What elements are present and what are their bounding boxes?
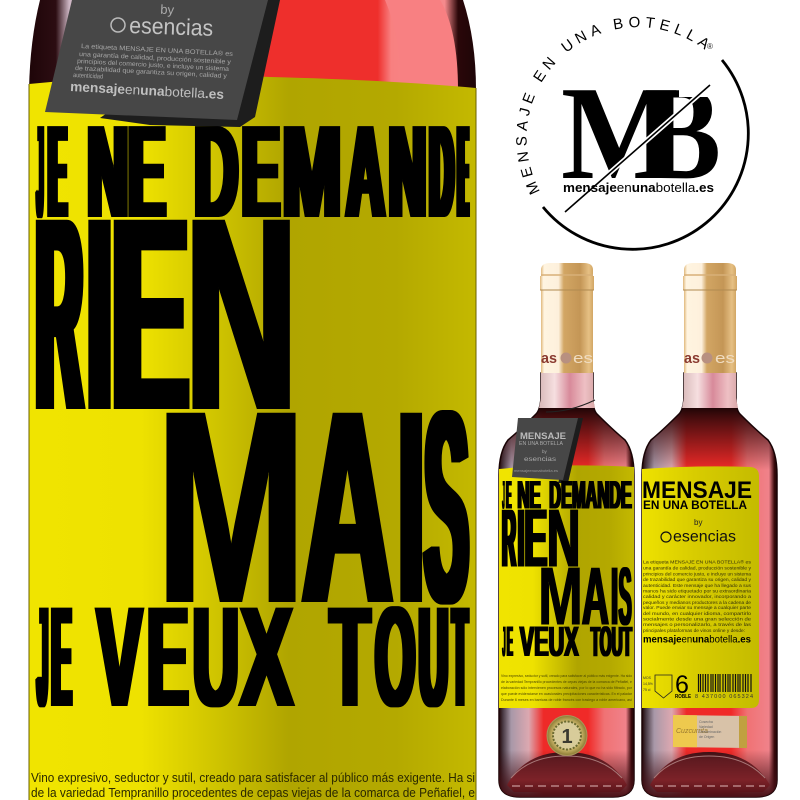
brand logo (516, 16, 750, 251)
hang tag: by (542, 449, 548, 454)
base shading (499, 750, 634, 797)
headline: large: M (282, 98, 341, 245)
small bottle: front (499, 263, 634, 797)
small description: de la variedad Tempranillo procedentes de cepas viejas de la comarca de Peñafiel, e (501, 679, 633, 684)
infographic canvas: TOUT (591, 618, 632, 666)
headline: small: E (507, 618, 513, 666)
hang tag: esencias (524, 457, 556, 463)
back label paragraph: principales plataformas de vinos online y desde: (643, 628, 745, 633)
small description: Durante 6 meses en barricas de roble francés con trasiego a roble americano, así (501, 697, 633, 702)
hang tag: La etiqueta MENSAJE EN UNA BOTELLA® es (81, 42, 234, 58)
logo website: mensajeenunabotella.es (563, 180, 714, 195)
neck (539, 373, 595, 408)
hang tag: principios del comercio justo, e incluye un sistema (77, 58, 229, 73)
headline: large: I (78, 161, 121, 468)
headline: large: J (37, 98, 43, 245)
age number: 6 (675, 671, 689, 699)
punt (650, 752, 770, 792)
by text: by (694, 518, 702, 527)
punt (507, 752, 627, 792)
back label paragraph: manos ha sido etiquetado por su extraordinaria (643, 588, 751, 594)
esencias logo: esencias (673, 528, 736, 546)
headline: small: A (582, 550, 609, 643)
barcode (695, 674, 753, 700)
winery sticker: Denominación (699, 730, 721, 734)
medal: 1 (561, 726, 573, 748)
barcode: 8 437000 065324 (695, 694, 753, 700)
headline: large: X (240, 578, 293, 737)
back label paragraph: pequeños y medianos productores a la cadena de (643, 600, 751, 605)
headline: small: I (609, 550, 620, 643)
small description: Vino expresivo, seductor y sutil, creado para satisfacer al público más exigente. Ha sido (501, 673, 633, 678)
headline: small: E (506, 474, 511, 518)
winery sticker: de Origen (699, 735, 714, 739)
back label paragraph: La etiqueta MENSAJE EN UNA BOTELLA® es (643, 558, 752, 564)
circle arc (543, 60, 748, 249)
back label (642, 466, 759, 708)
back label heading: EN UNA BOTELLA (643, 500, 747, 512)
headline: large: R (36, 161, 82, 468)
small bottle: back (642, 263, 777, 797)
headline: large: A (302, 354, 393, 661)
capsule logo: as (541, 350, 557, 367)
headline: large: M (156, 354, 306, 661)
infographic canvas: DEMANDE (549, 474, 632, 518)
headline: large: J (37, 578, 48, 737)
capsule logo: as (684, 350, 700, 367)
back label paragraph: mensajes o personalizarlo, a través de las (643, 622, 752, 627)
capsule logo (541, 350, 593, 367)
headline: small: NE (517, 474, 541, 518)
infographic canvas: T (453, 578, 467, 737)
back label paragraph: autenticidad. Este mensaje que ha llegado a sus (643, 583, 752, 588)
back label paragraph: del mundo, en cualquier idioma, compartirlo (643, 611, 751, 616)
hang tag: MENSAJE (520, 431, 566, 441)
hang tag: by (160, 2, 175, 17)
monogram MB: M (561, 59, 680, 207)
headline: large: O (375, 578, 415, 737)
small legal text: 14,5% (643, 682, 653, 686)
infographic canvas: S (618, 550, 632, 643)
small legal text: MOS (643, 676, 652, 680)
registered mark: ® (707, 42, 713, 51)
hang tag: esencias (129, 12, 214, 41)
headline: large: D (194, 98, 238, 245)
back label paragraph: socialmente desde una gran selección de (643, 616, 751, 622)
back label paragraph: principios del comercio justo, e incluye un sistema (643, 572, 751, 576)
neck string (546, 400, 595, 412)
hang tag: mensajeenunabotella.es (514, 468, 558, 473)
monogram MB: B (644, 59, 721, 207)
hang tag: una garantía de calidad, producción sostenible y (79, 51, 232, 66)
headline: small (502, 474, 632, 666)
winery sticker: Cosecha (699, 720, 713, 724)
headline: large: NE (88, 98, 166, 245)
back label website: mensajeenunabotella.es (643, 634, 751, 646)
headline: large: N (389, 98, 426, 245)
back label paragraph: calidad y carácter innovador, incorporando a (643, 594, 751, 599)
small legal text (643, 676, 653, 692)
large bottle close-up (29, 0, 476, 800)
headline: large: E (112, 161, 188, 468)
capsule logo: es (573, 350, 593, 367)
headline: large: A (346, 98, 384, 245)
large bottle close-up: U (419, 578, 448, 737)
headline: small: J (502, 618, 506, 666)
capsule (683, 263, 737, 373)
headline: small: E (524, 492, 547, 584)
headline: large: E (49, 98, 66, 245)
headline: small: M (538, 550, 583, 643)
label (499, 465, 634, 708)
capsule logo (684, 350, 735, 367)
headline: small: R (502, 492, 516, 584)
headline: small: VEUX (520, 618, 579, 666)
small description (501, 673, 633, 702)
base shading (642, 750, 777, 797)
infographic canvas: D (430, 98, 453, 245)
back label heading: MENSAJE (642, 477, 752, 504)
headline: large: N (186, 161, 297, 468)
wine description text: de la variedad Tempranillo procedentes de cepas viejas de la comarca de Peñafiel, e (31, 786, 475, 800)
hang tag: de trazabilidad que garantiza su origen, calidad y (75, 65, 228, 80)
hang tag: EN UNA BOTELLA (519, 441, 564, 447)
wine description text (31, 771, 475, 800)
headline: small: N (547, 492, 580, 584)
headline: large: I (392, 354, 430, 661)
capsule logo: es (715, 350, 735, 367)
capsule (540, 263, 594, 373)
headline: small: J (502, 474, 505, 518)
back label paragraph: de trazabilidad que garantiza su origen, calidad y (643, 577, 752, 582)
headline: small: I (515, 492, 528, 584)
back label paragraph: una garantía de calidad, producción sostenible y (643, 566, 752, 570)
hang tag (45, 0, 280, 127)
headline: large: E (52, 578, 71, 737)
shoulder shading (499, 373, 634, 797)
hang tag: mensajeenunabotella.es (70, 79, 224, 102)
glass body (642, 373, 777, 797)
small legal text: 75 cl (643, 688, 651, 692)
circular brand text: MENSAJE EN UNA BOTELLA (516, 16, 708, 195)
shield mark (655, 675, 672, 698)
winery sticker: Cuzcurrita (676, 728, 708, 735)
medal (547, 716, 587, 756)
yellow label background (29, 76, 476, 800)
infographic canvas: E (459, 98, 467, 245)
headline: large: V (97, 578, 142, 737)
hang tag (512, 418, 583, 483)
age number: ROBLE (675, 694, 692, 700)
glass body (499, 373, 634, 797)
headline: large: T (330, 578, 370, 737)
small description: que puede evidenciarse en ocasionales precipitaciones características. En el paladar (501, 691, 633, 696)
winery sticker (673, 715, 747, 748)
headline: large: U (193, 578, 239, 737)
headline: large: E (147, 578, 188, 737)
infographic canvas: S (424, 354, 468, 661)
bottle glass upper body (29, 0, 476, 90)
headline: large: E (242, 98, 280, 245)
back label paragraph (643, 558, 752, 633)
hang tag: autenticidad (73, 72, 104, 81)
shoulder shading (642, 373, 777, 797)
winery sticker: Variedad (699, 725, 713, 729)
headline: large (36, 98, 468, 737)
wine description text: Vino expresivo, seductor y sutil, creado para satisfacer al público más exigente. Ha si (31, 771, 475, 785)
small description: elaboración sólo intervienen procesos naturales, por lo que no ha sido filtrado, por (501, 685, 633, 690)
back label paragraph: valor. Puede enviar su mensaje a cualquier parte (643, 605, 751, 610)
neck (682, 373, 738, 408)
pink highlight on glass (385, 0, 458, 90)
